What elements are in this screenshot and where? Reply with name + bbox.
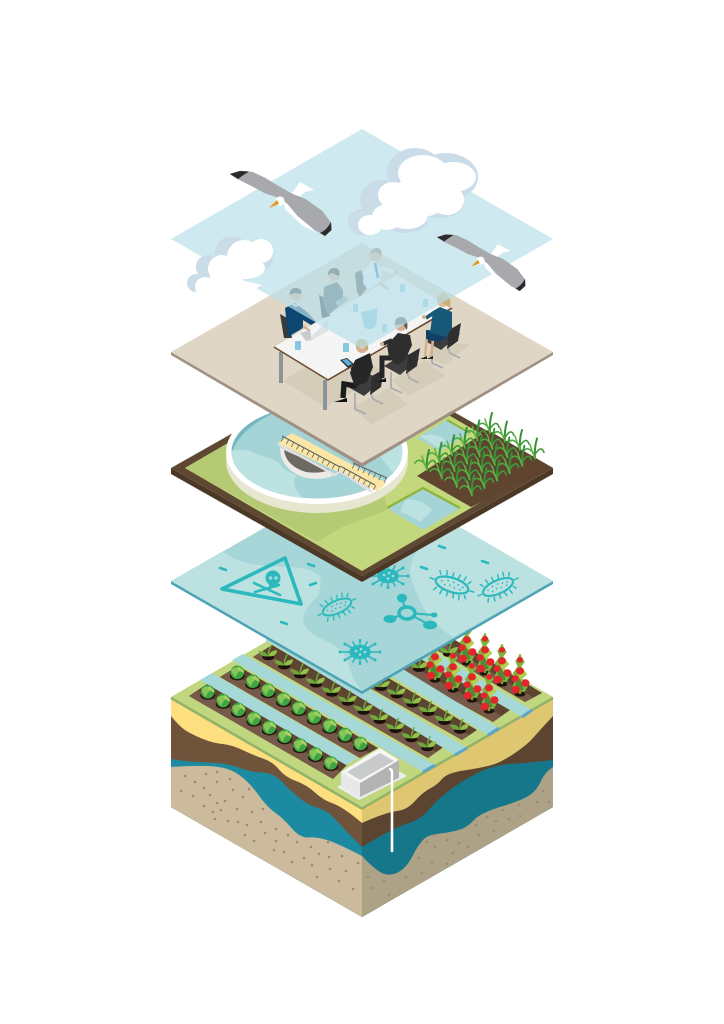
top surface — [171, 586, 553, 808]
layer: treatment plant and field — [171, 410, 553, 582]
channel ends — [423, 710, 532, 772]
bird: right gull — [437, 235, 525, 292]
cloud: large — [348, 148, 478, 235]
ground shadow — [185, 365, 387, 542]
icon: bacterium — [473, 568, 523, 606]
irrigation channels — [200, 598, 532, 772]
settling pond upper — [417, 420, 470, 451]
person: woman in teal suit — [420, 293, 452, 359]
floor edge — [171, 352, 553, 467]
well pipe — [391, 793, 393, 851]
settling pond — [387, 488, 460, 530]
chair — [425, 323, 461, 368]
layer: soil cube with crops — [171, 586, 553, 917]
lighter soil band — [189, 594, 534, 779]
left face strata — [171, 697, 362, 917]
corn plants — [415, 413, 544, 496]
cabbages — [200, 666, 368, 771]
icon: skull and crossbones — [254, 570, 280, 595]
bridge — [278, 433, 387, 492]
central clarifier — [280, 447, 336, 479]
plane surface — [171, 472, 553, 691]
layer: contaminated water plane — [171, 472, 553, 694]
crop field soil — [417, 430, 553, 507]
icon: bacterium — [426, 566, 478, 604]
laptop — [300, 320, 328, 341]
person: man in navy sweater — [280, 288, 316, 338]
person: man in light shirt and tie — [355, 248, 398, 297]
layer: meeting room floor — [171, 243, 553, 467]
right face strata — [362, 697, 553, 917]
chair — [348, 369, 384, 414]
icon: virus — [338, 639, 382, 665]
tomatoes — [427, 623, 529, 714]
lighter water patches — [171, 523, 553, 691]
person: man in dark suit, grey hair — [377, 317, 412, 382]
circular tank — [226, 400, 408, 513]
person: man in grey sweater — [319, 268, 349, 318]
cloud: small — [187, 236, 273, 297]
pump house — [337, 748, 407, 800]
sand stipple — [181, 772, 549, 895]
plate brown surface — [171, 360, 553, 576]
seedlings — [258, 642, 469, 751]
layer: translucent sky plane — [171, 129, 553, 349]
soil strips — [189, 588, 542, 779]
green ground — [185, 365, 540, 571]
plane edge — [171, 581, 553, 694]
water glasses and jug — [295, 284, 428, 352]
icon: virus — [366, 563, 410, 589]
dashes — [220, 546, 488, 624]
bird: left gull — [230, 171, 332, 237]
chair — [384, 348, 420, 393]
floor surface — [171, 243, 553, 463]
icon: toxic warning triangle — [222, 558, 301, 604]
icon: molecule — [384, 594, 438, 629]
furniture shadows — [283, 342, 470, 425]
plate side — [171, 468, 553, 582]
person: blond man with tablet — [334, 339, 373, 402]
icon: bacterium — [314, 589, 360, 625]
isometric layered illustration — [170, 129, 554, 917]
meeting table — [274, 275, 452, 410]
